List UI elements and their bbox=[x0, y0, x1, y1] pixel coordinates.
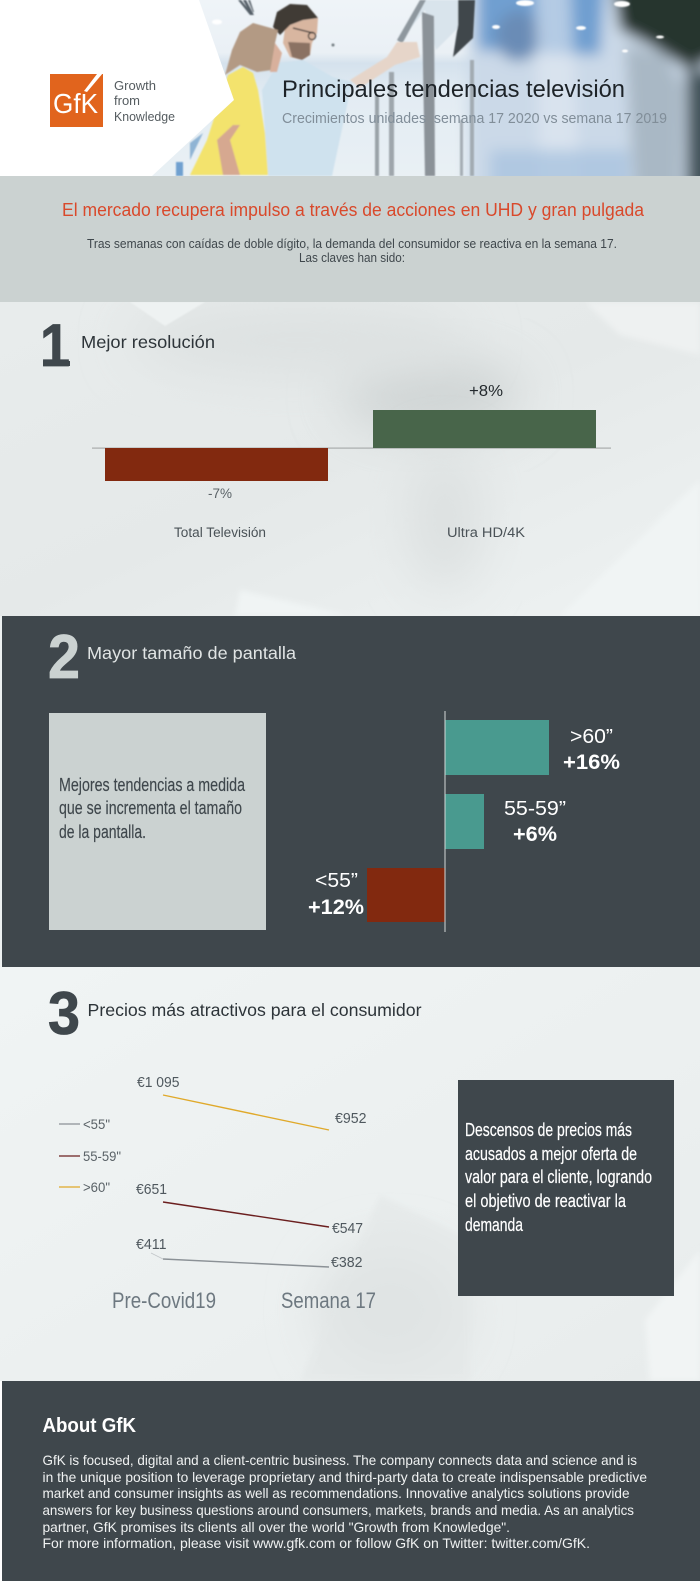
right side of photo: reflected person and haze bbox=[468, 0, 700, 196]
logo: GfK bbox=[50, 73, 103, 127]
intro band bbox=[0, 176, 700, 302]
label: >60: >60” bbox=[570, 726, 613, 748]
price labels bbox=[136, 1075, 366, 1271]
price labels: €411 bbox=[136, 1237, 166, 1253]
text box: descensos de precios: valor para el cliente, logrando bbox=[465, 1167, 652, 1187]
couple bbox=[176, 4, 420, 176]
heading: precios más atractivos: Precios más atractivos para el consumidor bbox=[88, 1000, 422, 1020]
label: >60: +16% bbox=[563, 751, 620, 774]
label: 55-59: +6% bbox=[513, 823, 557, 846]
intro paragraph: Tras semanas con caídas de doble dígito, la demanda del consumidor se reactiva en la semana 17. bbox=[87, 236, 617, 251]
heading: mayor tamaño de pantalla: Mayor tamaño de pantalla bbox=[87, 643, 296, 663]
about paragraph: in the unique position to leverage proprietary and third-party data to create indispensable predictive bbox=[42, 1469, 647, 1485]
bar: >60 bbox=[445, 720, 549, 775]
price labels: €952 bbox=[335, 1111, 366, 1127]
axis labels: Semana 17 bbox=[281, 1288, 376, 1313]
logo tagline: Growth bbox=[114, 78, 156, 93]
about paragraph: For more information, please visit www.gfk.com or follow GfK on Twitter: twitter.com/GfK. bbox=[42, 1535, 590, 1551]
about paragraph: partner, GfK promises its clients all over the world "Growth from Knowledge". bbox=[42, 1519, 510, 1535]
heading: mejor resolución: Mejor resolución bbox=[81, 332, 215, 352]
about paragraph: answers for key business questions around consumers, markets, brands and media. As an analytics bbox=[42, 1502, 634, 1518]
label: 55-59 bbox=[504, 798, 566, 846]
text box: descensos de precios: Descensos de precios más bbox=[465, 1120, 632, 1140]
value: -7%: -7% bbox=[208, 486, 232, 501]
category: ultra HD/4K: Ultra HD/4K bbox=[447, 525, 525, 540]
main title: Principales tendencias televisión bbox=[282, 76, 625, 103]
number 2: 2 bbox=[48, 623, 80, 692]
intro paragraph: Las claves han sido: bbox=[299, 250, 405, 265]
logo tagline: from bbox=[114, 93, 140, 108]
price labels: €382 bbox=[331, 1255, 362, 1271]
label: <55: <55” bbox=[315, 870, 358, 892]
subtitle: Crecimientos unidades semana 17 2020 vs semana 17 2019 bbox=[282, 110, 667, 127]
number 1: 1 bbox=[40, 312, 70, 379]
label: <55: +12% bbox=[308, 896, 364, 919]
label: >60 bbox=[563, 726, 620, 774]
slope chart: prices bbox=[112, 1075, 376, 1313]
category: total televisión: Total Televisión bbox=[174, 525, 266, 540]
about paragraph: market and consumer insights as well as recommendations. Innovative analytics solutions provide bbox=[42, 1485, 630, 1501]
panel 1: mejor resolución bbox=[0, 302, 700, 616]
logo tagline bbox=[114, 78, 175, 124]
legend bbox=[59, 1117, 121, 1195]
text box: descensos de precios: el objetivo de reactivar la bbox=[465, 1191, 627, 1211]
number 3: 3 bbox=[48, 980, 80, 1047]
logo tagline: Knowledge bbox=[114, 109, 175, 124]
text box: mejores tendencias: Mejores tendencias a medida bbox=[59, 775, 246, 795]
price labels: €651 bbox=[136, 1182, 167, 1198]
bar: <55 bbox=[367, 868, 445, 922]
value: +8%: +8% bbox=[469, 383, 503, 400]
price labels: €547 bbox=[332, 1221, 363, 1237]
text box: mejores tendencias: que se incrementa el tamaño bbox=[59, 798, 242, 818]
about heading: About GfK bbox=[42, 1415, 137, 1437]
about paragraph bbox=[42, 1452, 647, 1551]
label: <55 bbox=[308, 870, 364, 919]
text box: descensos de precios bbox=[458, 1080, 674, 1296]
bar: ultra HD/4K bbox=[373, 410, 596, 448]
legend: 55-59" bbox=[83, 1149, 121, 1164]
legend: <55" bbox=[83, 1117, 110, 1132]
label: 55-59: 55-59” bbox=[504, 798, 566, 820]
intro heading: El mercado recupera impulso a través de acciones en UHD y gran pulgada bbox=[62, 200, 645, 220]
intro paragraph bbox=[87, 236, 617, 265]
about paragraph: GfK is focused, digital and a client-centric business. The company connects data and science and is bbox=[42, 1452, 637, 1468]
logo: GfK: GfK bbox=[53, 88, 98, 119]
price labels: €1 095 bbox=[137, 1075, 180, 1091]
legend: >60" bbox=[83, 1180, 110, 1195]
line: 55-59 bbox=[163, 1202, 329, 1227]
bar: 55-59 bbox=[445, 794, 484, 849]
text box: descensos de precios: demanda bbox=[465, 1215, 524, 1235]
header photo: couple looking at television screens bbox=[152, 0, 700, 176]
line: <55 bbox=[151, 1253, 329, 1267]
bar: total televisión bbox=[105, 448, 328, 481]
line: >60 bbox=[163, 1095, 329, 1130]
panel 3: precios más atractivos bbox=[0, 967, 700, 1381]
text box: descensos de precios: acusados a mejor oferta de bbox=[465, 1144, 637, 1164]
bar chart: total televisión vs ultra HD bbox=[92, 383, 611, 540]
panel: about GfK bbox=[2, 1381, 700, 1581]
bar chart: growth by screen size bbox=[308, 711, 620, 932]
text box: mejores tendencias bbox=[49, 713, 266, 930]
panel 2: mayor tamaño de pantalla bbox=[0, 616, 700, 967]
text box: mejores tendencias: de la pantalla. bbox=[59, 822, 146, 842]
screens and poles bbox=[212, 0, 475, 176]
axis labels bbox=[112, 1288, 376, 1313]
axis labels: Pre-Covid19 bbox=[112, 1288, 216, 1313]
header bbox=[50, 0, 700, 176]
